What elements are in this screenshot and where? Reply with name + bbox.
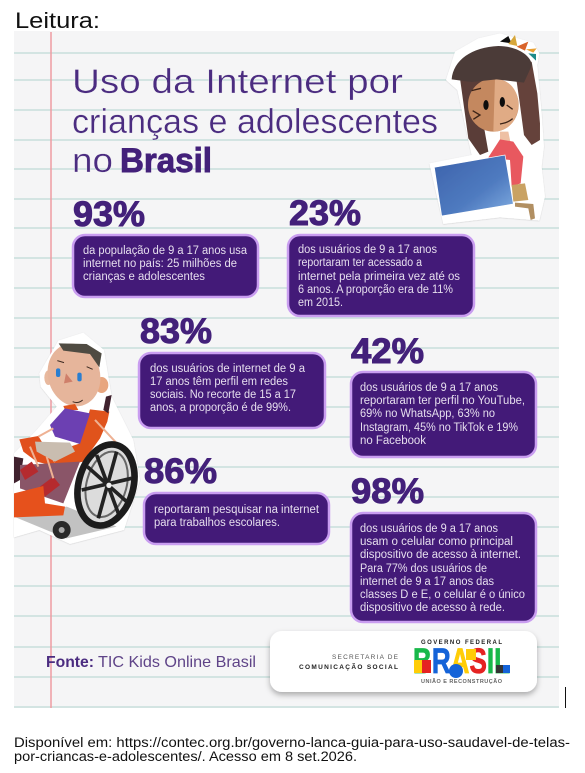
number: 23%: 23% — [289, 193, 361, 233]
illustration: girl with laptop — [429, 33, 545, 224]
stat card: 86%: reportaram pesquisar na internet — [154, 504, 320, 516]
stat card: 42%: Instagram, 45% no TikTok e 19% — [360, 422, 518, 434]
source line: TIC Kids Online Brasil — [98, 654, 256, 671]
title: crianças e adolescentes — [72, 103, 438, 141]
stat card: 98%: Para 77% dos usuários de — [360, 563, 487, 575]
title: Uso da Internet por — [72, 63, 403, 101]
stat card: 98%: dispositivo de acesso à rede. — [360, 602, 505, 614]
stat card: 23%: em 2015. — [298, 297, 343, 309]
stat card: 93%: internet no país: 25 milhões de — [83, 258, 237, 270]
citation: Disponível em: https://contec.org.br/governo-lanca-guia-para-uso-saudavel-de-telas- — [14, 735, 570, 750]
stat card: 98%: dos usuários de 9 a 17 anos — [360, 523, 498, 535]
stat card: 23%: 6 anos. A proporção era de 11% — [298, 284, 453, 296]
stat card: 86% — [144, 451, 329, 544]
stat card: 98%: classes D e E, o celular é o único — [360, 589, 525, 601]
heading: Leitura: Leitura: — [15, 8, 100, 33]
stat card: 93% — [73, 194, 258, 297]
logo: Brasil wordmark: BRASIL — [413, 642, 510, 681]
citation: por-criancas-e-adolescentes/. Acesso em 8 set.2026. — [14, 749, 357, 764]
stat card: 42%: 69% no WhatsApp, 63% no — [360, 408, 495, 420]
stat card: 98% — [351, 471, 536, 622]
stat card: 83%: 17 anos têm perfil em redes — [150, 376, 288, 388]
stat card: 98%: internet de 9 a 17 anos das — [360, 576, 494, 588]
number: 86%: 86% — [144, 451, 217, 491]
stat card: 23% — [288, 193, 474, 316]
stat card: 98%: dispositivo de acesso à internet. — [360, 549, 521, 561]
number: 93%: 93% — [73, 194, 145, 234]
title: Brasil — [120, 142, 212, 180]
stat card: 93%: crianças e adolescentes — [83, 271, 205, 283]
illustration: boy in wheelchair — [14, 333, 143, 544]
title — [72, 63, 438, 180]
stat card: 83%: sociais. No recorte de 15 a 17 — [150, 389, 296, 401]
stat card: 83% — [139, 311, 325, 428]
logo card: COMUNICAÇÃO SOCIAL — [299, 662, 398, 671]
logo card — [270, 631, 537, 692]
stat card: 23%: reportaram ter acessado a — [298, 257, 423, 269]
stat card: 42% — [351, 331, 536, 457]
stat card: 93%: da população de 9 a 17 anos usa — [83, 245, 248, 257]
stat card: 83%: dos usuários de internet de 9 a — [150, 363, 306, 375]
citation — [14, 735, 570, 764]
number: 83%: 83% — [140, 311, 212, 351]
logo card: SECRETARIA DE — [332, 654, 399, 661]
source line: Fonte: — [46, 654, 94, 671]
stat card: 86%: para trabalhos escolares. — [154, 517, 280, 529]
stat card: 42%: reportaram ter perfil no YouTube, — [360, 395, 525, 407]
cursor mark — [564, 687, 566, 708]
number: 98%: 98% — [351, 471, 424, 511]
stat card: 23%: dos usuários de 9 a 17 anos — [298, 244, 437, 256]
logo card: GOVERNO FEDERAL — [421, 640, 502, 646]
stat card: 23%: internet pela primeira vez até os — [298, 271, 460, 283]
stat card: 42%: dos usuários de 9 a 17 anos — [360, 382, 498, 394]
logo card: UNIÃO E RECONSTRUÇÃO — [421, 678, 503, 685]
number: 42%: 42% — [351, 331, 424, 371]
stat card: 83%: anos, a proporção é de 99%. — [150, 402, 291, 414]
stat card: 98%: usam o celular como principal — [360, 536, 513, 548]
stat card: 42%: no Facebook — [360, 435, 426, 447]
title: no — [72, 142, 113, 180]
